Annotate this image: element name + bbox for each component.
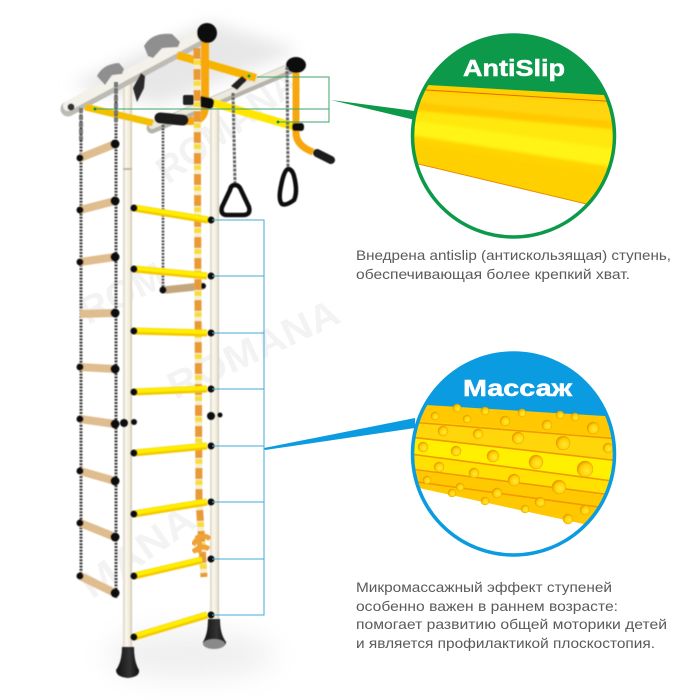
climbing rope (193, 48, 210, 577)
callout circle: massage (410, 350, 620, 555)
text block: massage description: Микромассажный эффект ступеней (356, 579, 612, 595)
callout circle: antislip (410, 30, 620, 245)
front post (123, 82, 132, 648)
text block: antislip description: Внедрена antislip (антискользящая) ступень, (356, 247, 671, 263)
post feet (116, 619, 226, 678)
watermarks: MANA (73, 498, 204, 607)
text block: antislip description (356, 247, 671, 282)
heading: massage: Массаж (463, 375, 573, 401)
swing trapeze (160, 125, 206, 294)
text block: massage description (356, 579, 667, 651)
text block: massage description: помогает развитию общей моторики детей (356, 616, 667, 632)
wall-bars frame (68, 23, 331, 648)
back post (210, 108, 219, 620)
gymnastic rings (222, 67, 296, 215)
ceiling beam right (152, 66, 292, 128)
text block: massage description: особенно важен в раннем возрасте: (356, 598, 618, 614)
ceiling and floor shadows (70, 22, 300, 679)
rope ladder (76, 82, 222, 598)
callout pointer: antislip (331, 100, 415, 120)
watermarks (73, 61, 346, 607)
callout pointer: massage (264, 418, 415, 450)
yellow rungs (130, 204, 214, 640)
top connector bars (68, 23, 331, 160)
text block: antislip description: обеспечивающая более крепкий хват. (356, 266, 630, 282)
watermarks: ROMANA (161, 292, 346, 408)
blue rung bracket (212, 220, 264, 615)
watermarks: ROM (73, 255, 172, 333)
green callout bracket (94, 74, 329, 124)
ceiling beam left (68, 32, 206, 109)
heading: AntiSlip: AntiSlip (463, 55, 565, 81)
text block: massage description: и является профилактикой плоскостопия. (356, 635, 655, 651)
watermarks: ROMANA (149, 61, 307, 192)
